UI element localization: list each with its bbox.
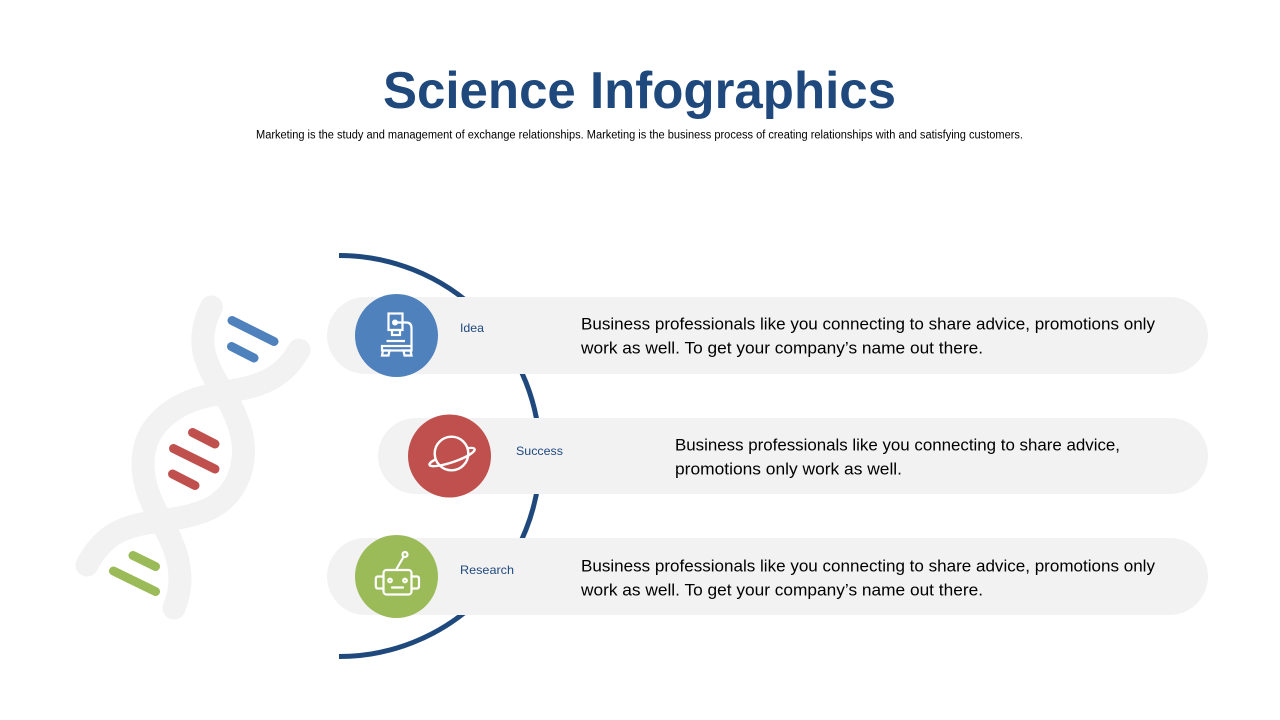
icon: microscope [382,314,412,356]
pill background [327,538,1208,615]
icon: planet [429,437,475,470]
description: work as well. To get your company’s name out there. [580,338,983,358]
DNA rungs: green [114,556,156,592]
pill background [378,418,1208,494]
description: promotions only work as well. [675,460,902,478]
pill background [327,297,1208,374]
description: Business professionals like you connecting to share advice, promotions only [581,556,1155,576]
description [675,436,1120,478]
label: Research [460,563,514,577]
DNA strands [87,307,299,608]
DNA rungs: blue [232,320,274,358]
icon: DNA helix [87,307,299,608]
description [580,556,1155,600]
panel: Idea [327,294,1208,377]
icon: robot [376,552,419,594]
arc connector [339,256,540,656]
DNA rungs: red [172,432,215,486]
circle badge [355,535,438,618]
description: Business professionals like you connecting to share advice, [675,436,1120,454]
description: work as well. To get your company’s name out there. [580,580,983,600]
circle badge [408,414,491,498]
label: Success [516,444,563,458]
label: Idea [460,321,484,335]
title: Science Infographics [383,62,896,120]
panel: Research [327,535,1208,618]
description [580,314,1155,358]
description: Business professionals like you connecting to share advice, promotions only [581,314,1155,334]
subtitle: Marketing is the study and management of exchange relationships. Marketing is the business process of creating relationships with and satisfying customers. [256,130,1023,142]
circle badge [355,294,438,377]
panel: Success [378,414,1208,498]
